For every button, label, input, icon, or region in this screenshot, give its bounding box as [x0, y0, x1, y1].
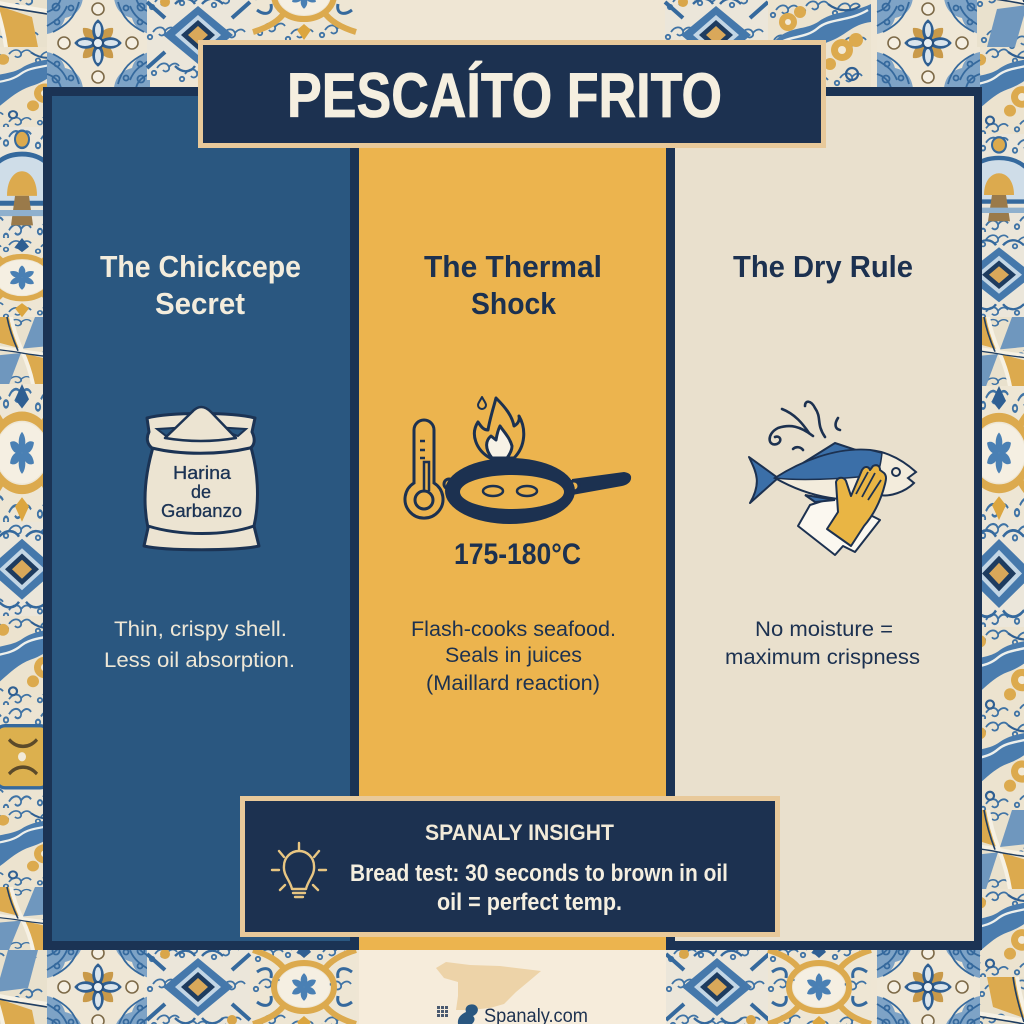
icon: flame: [474, 397, 524, 458]
moisture swirls: [770, 402, 840, 450]
icon: frying pan: [444, 458, 631, 524]
icon: spanaly logo: [458, 1004, 478, 1024]
icon: light bulb: [272, 843, 326, 897]
body text: no moisture: [725, 618, 920, 669]
heading: the chickcepe secret: The Chickcepe: [100, 249, 301, 284]
heading: the thermal shock: The Thermal: [424, 249, 602, 284]
icon: flour sack: [144, 407, 259, 550]
title banner: [198, 40, 826, 148]
sack label: Garbanzo: [161, 501, 242, 521]
body text: thin crispy shell: Thin, crispy shell.: [114, 618, 287, 641]
body text: flash-cooks seafood: Seals in juices: [445, 644, 582, 667]
footer: branding strip: [359, 950, 666, 1024]
insight text: oil = perfect temp.: [437, 889, 622, 916]
heading: the chickcepe secret: [100, 249, 301, 321]
body text: flash-cooks seafood: (Maillard reaction): [426, 672, 600, 695]
icon: thermometer: [405, 420, 443, 518]
insight heading: SPANALY INSIGHT: [425, 820, 615, 845]
body text: no moisture: maximum crispness: [725, 646, 920, 669]
heading: the dry rule: The Dry Rule: [733, 249, 913, 284]
insight text: [350, 860, 728, 916]
heading: the chickcepe secret: Secret: [155, 286, 245, 321]
heading: the thermal shock: [424, 249, 602, 321]
body text: flash-cooks seafood: Flash-cooks seafood.: [411, 618, 616, 641]
icon: fish with glove and towel: [749, 402, 916, 555]
map of Spain: [436, 962, 541, 1010]
body text: thin crispy shell: [104, 618, 295, 672]
body text: no moisture: No moisture =: [755, 618, 893, 641]
body text: thin crispy shell: Less oil absorption.: [104, 649, 295, 672]
panel: chickpea secret: [52, 96, 350, 941]
temperature label: 175-180°C: [454, 538, 581, 571]
icon: dot grid: [437, 1006, 448, 1017]
body text: flash-cooks seafood: [411, 618, 616, 695]
insight callout: [240, 796, 780, 937]
title text: PESCAÍTO FRITO: [287, 61, 722, 131]
panel: thermal shock: [359, 96, 666, 950]
heading: the thermal shock: Shock: [471, 286, 557, 321]
panel: dry rule: [675, 96, 974, 941]
sack label: Harina: [173, 463, 232, 483]
dark frame behind panels: [43, 87, 982, 950]
insight text: Bread test: 30 seconds to brown in oil: [350, 860, 728, 887]
sack label: de: [191, 482, 211, 502]
sack label: [161, 463, 242, 521]
